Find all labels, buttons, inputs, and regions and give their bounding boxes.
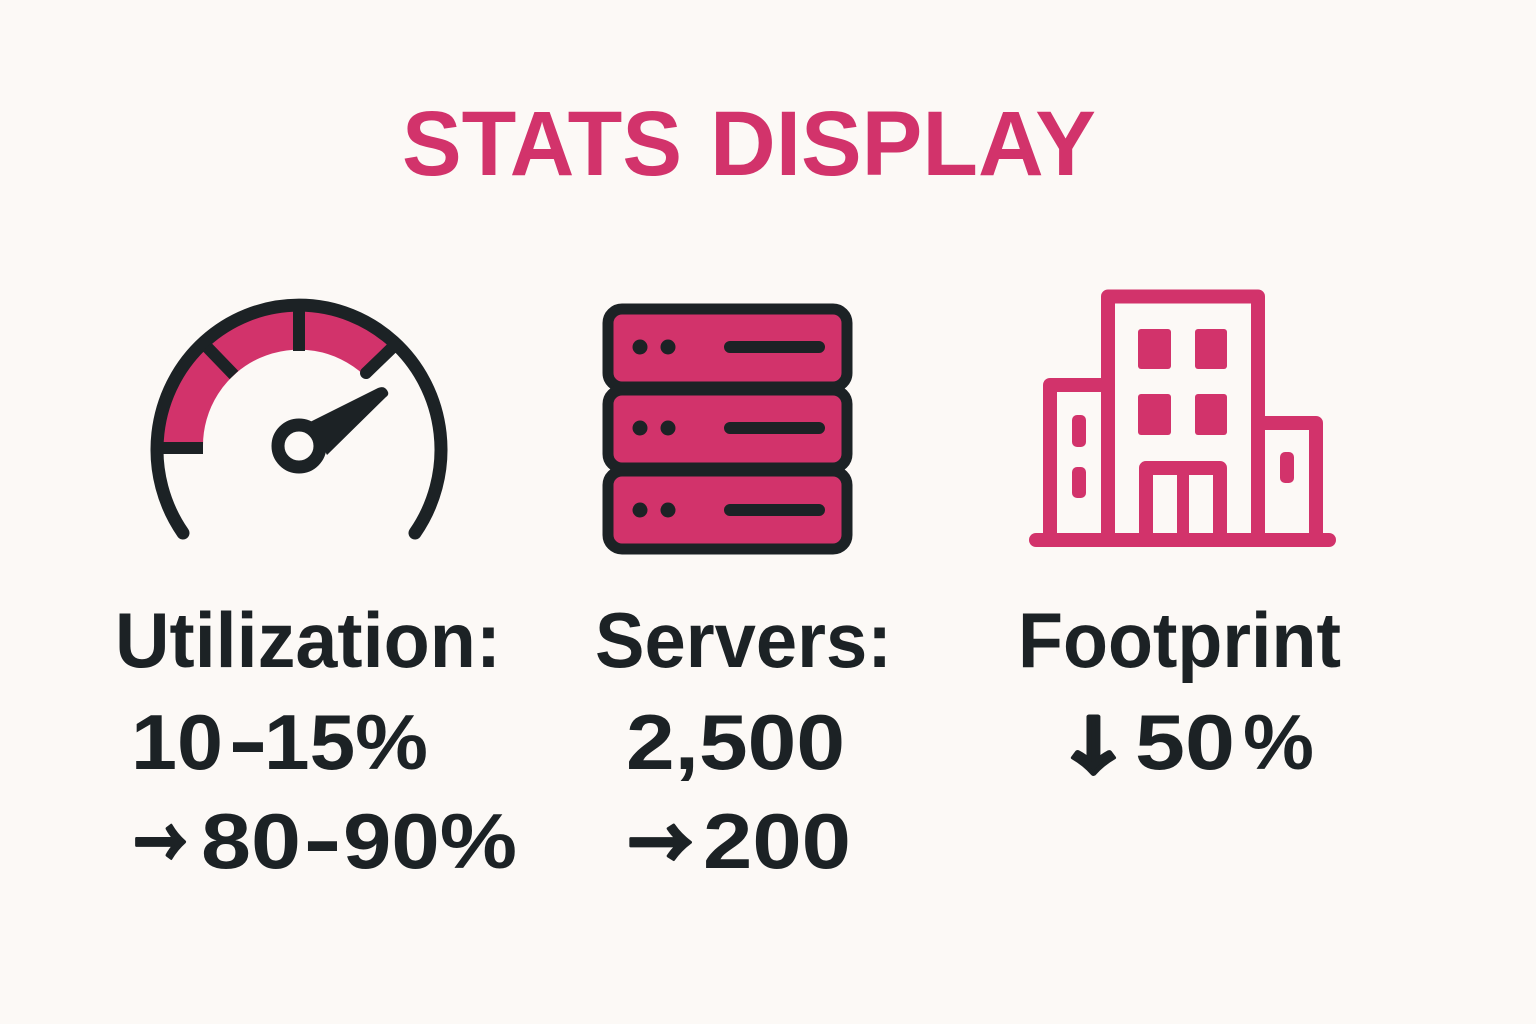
label: utilization: – — [232, 697, 264, 785]
label: servers: Servers: — [595, 596, 892, 684]
label: utilization: 15% — [264, 698, 428, 786]
label: utilization: → — [134, 787, 187, 889]
label: utilization — [115, 596, 517, 889]
label: footprint — [1018, 596, 1341, 787]
label: utilization: – — [307, 796, 338, 884]
title: DISPLAY — [710, 93, 1096, 195]
label: servers: 200 — [703, 797, 851, 885]
label: utilization: Utilization: — [115, 596, 501, 684]
label: utilization: 90% — [343, 797, 517, 885]
title: STATS — [402, 93, 682, 195]
label: footprint: 50 — [1135, 698, 1235, 786]
label: utilization: 80 — [201, 797, 301, 885]
label: footprint: Footprint — [1018, 596, 1341, 684]
icon: server stack — [608, 309, 847, 549]
icon: office buildings — [1036, 296, 1329, 540]
label: utilization: 10 — [131, 698, 223, 786]
label: servers — [595, 596, 892, 891]
label: footprint: % — [1243, 698, 1314, 786]
label: footprint: ↓ — [1052, 698, 1135, 787]
label: servers: 2,500 — [626, 698, 845, 786]
icon: speedometer gauge — [155, 303, 441, 533]
label: servers: → — [628, 785, 693, 891]
title — [402, 93, 1096, 195]
